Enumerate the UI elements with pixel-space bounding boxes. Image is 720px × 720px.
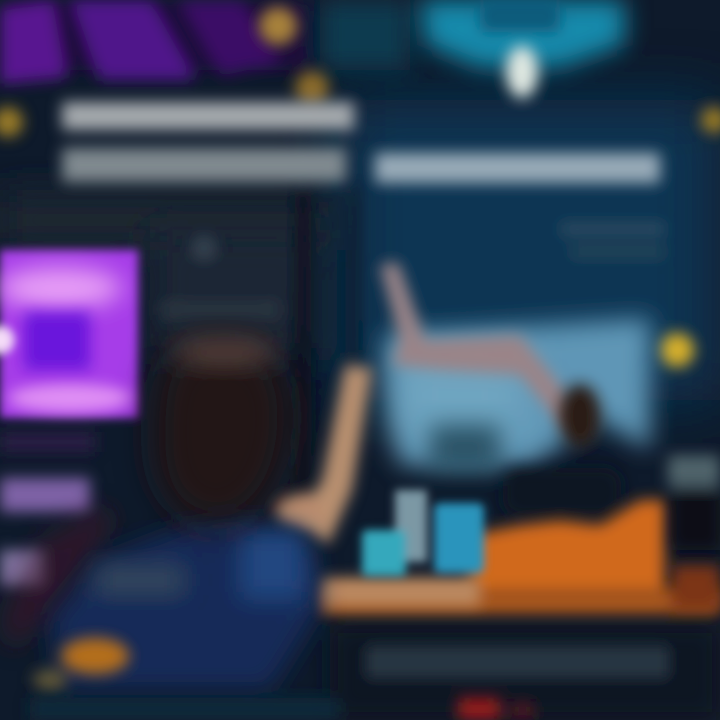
top right teal glow: [320, 0, 625, 98]
figure: right side grey block: [668, 455, 720, 550]
chart: light blue panel: [380, 262, 650, 470]
figure: foreground person: [50, 338, 372, 690]
footer: bottom text strip: [30, 645, 670, 720]
panel: purple monitor: [0, 250, 138, 418]
figure: seated person right: [503, 384, 621, 516]
top left purple ceiling: [0, 0, 310, 84]
text block: small blurred caption: [160, 222, 665, 320]
chart: orange bars and desk: [320, 500, 720, 614]
figure: red glow behind shoulder: [0, 505, 115, 650]
icon: orange badge bottom left: [33, 638, 129, 691]
panel: left stacked stripes: [0, 432, 95, 586]
icon: orange dots: [0, 7, 720, 367]
title: blurred text lines: [62, 102, 660, 183]
icon: cyan cups: [362, 490, 484, 576]
